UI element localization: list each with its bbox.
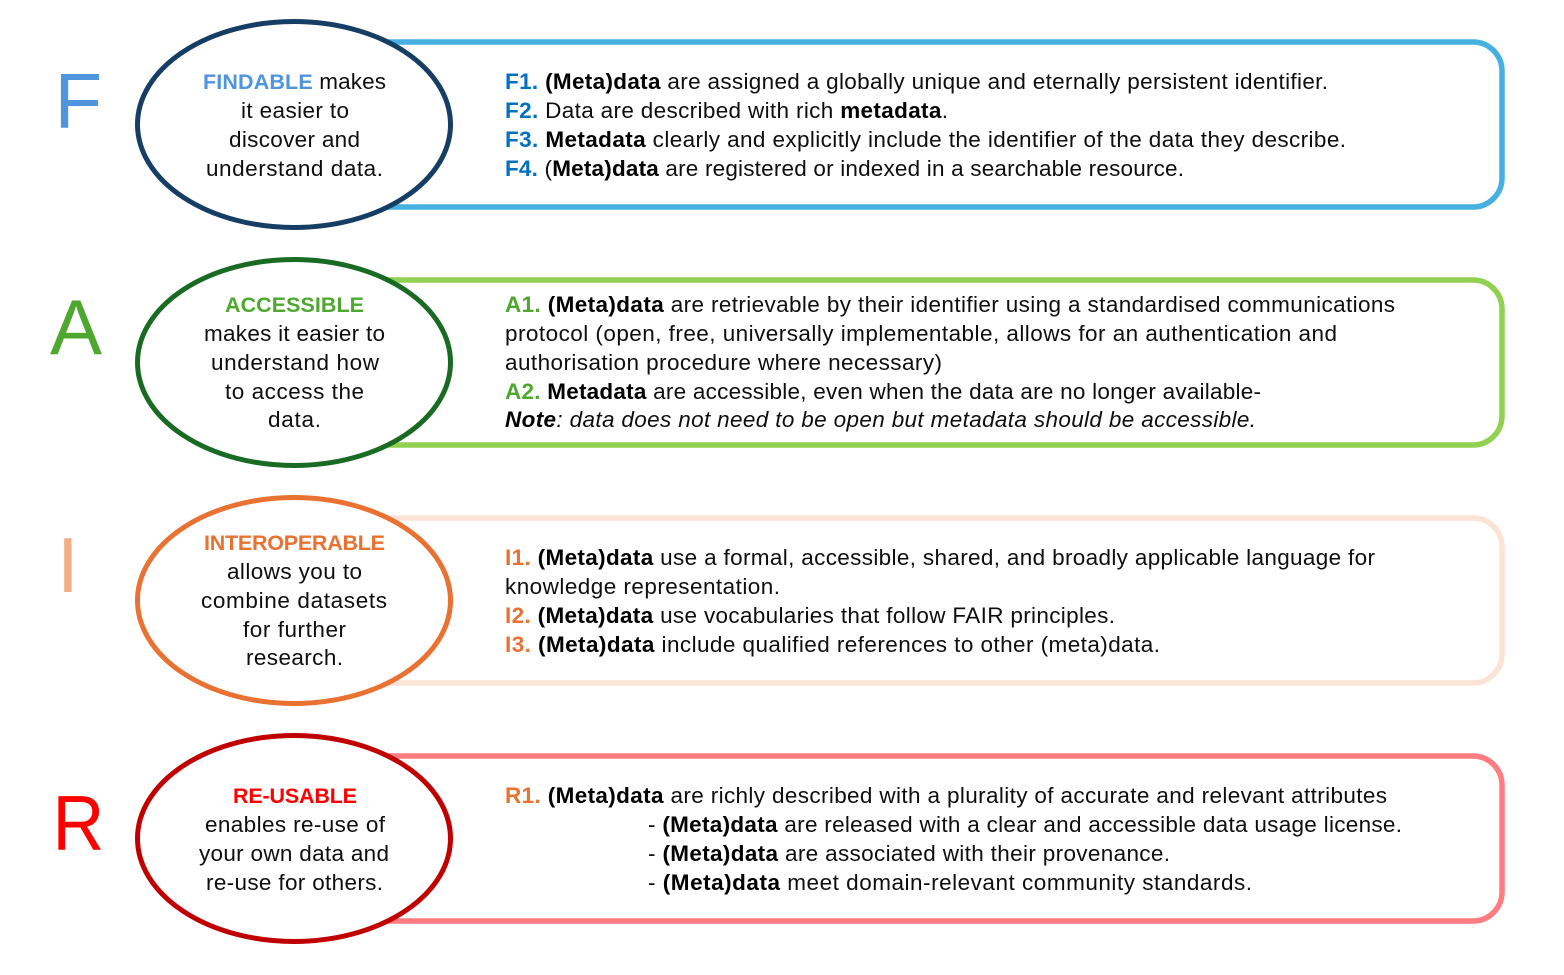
interoperable description: research. bbox=[246, 645, 343, 670]
findable description: discover and bbox=[229, 127, 360, 152]
interoperable principles I1-I3 bbox=[505, 545, 1376, 657]
interoperable statements box bbox=[300, 518, 1502, 683]
accessible principles A1-A2: A2. Metadata are accessible, even when the data are no longer available- bbox=[505, 379, 1261, 404]
letter A: A bbox=[50, 283, 102, 371]
re-usable description: re-use for others. bbox=[206, 870, 383, 895]
accessible principles A1-A2: protocol (open, free, universally implementable, allows for an authentication and bbox=[505, 321, 1337, 346]
interoperable ellipse bbox=[138, 498, 450, 704]
re-usable description bbox=[199, 784, 389, 895]
panel: findable bbox=[54, 22, 1502, 228]
findable principles F1-F4: F2. Data are described with rich metadata. bbox=[505, 98, 948, 123]
findable principles F1-F4 bbox=[505, 69, 1346, 181]
findable description: FINDABLE makes bbox=[203, 69, 386, 94]
re-usable principles R1: R1. (Meta)data are richly described with a plurality of accurate and relevant attributes bbox=[505, 783, 1387, 808]
letter F: F bbox=[54, 57, 102, 145]
re-usable ellipse bbox=[138, 736, 450, 942]
accessible description: understand how bbox=[211, 350, 380, 375]
accessible description bbox=[204, 293, 385, 432]
findable description: it easier to bbox=[241, 98, 349, 123]
panel: accessible bbox=[50, 260, 1502, 466]
letter I: I bbox=[57, 521, 79, 609]
findable ellipse bbox=[138, 22, 450, 228]
accessible description: ACCESSIBLE bbox=[225, 293, 364, 317]
accessible description: to access the bbox=[225, 379, 364, 404]
re-usable principles R1: - (Meta)data are associated with their provenance. bbox=[648, 841, 1170, 866]
re-usable principles R1 bbox=[505, 783, 1402, 895]
interoperable principles I1-I3: I3. (Meta)data include qualified references to other (meta)data. bbox=[505, 632, 1160, 657]
interoperable description: combine datasets bbox=[201, 588, 387, 613]
re-usable principles R1: - (Meta)data are released with a clear and accessible data usage license. bbox=[648, 812, 1402, 837]
findable principles F1-F4: F3. Metadata clearly and explicitly include the identifier of the data they describe. bbox=[505, 127, 1346, 152]
panel: interoperable bbox=[57, 498, 1502, 704]
panel: re-usable bbox=[52, 736, 1502, 942]
accessible principles A1-A2 bbox=[505, 292, 1395, 432]
accessible ellipse bbox=[138, 260, 450, 466]
re-usable principles R1: - (Meta)data meet domain-relevant community standards. bbox=[648, 870, 1252, 895]
re-usable description: RE-USABLE bbox=[233, 784, 357, 808]
re-usable description: your own data and bbox=[199, 841, 389, 866]
accessible statements box bbox=[300, 280, 1502, 445]
interoperable description: allows you to bbox=[227, 559, 362, 584]
accessible principles A1-A2: authorisation procedure where necessary) bbox=[505, 350, 942, 375]
interoperable principles I1-I3: I1. (Meta)data use a formal, accessible, shared, and broadly applicable language for bbox=[505, 545, 1376, 570]
accessible principles A1-A2: Note: data does not need to be open but metadata should be accessible. bbox=[505, 407, 1256, 432]
interoperable description: for further bbox=[243, 617, 346, 642]
accessible description: data. bbox=[268, 407, 321, 432]
accessible description: makes it easier to bbox=[204, 321, 385, 346]
letter R: R bbox=[52, 779, 104, 867]
interoperable principles I1-I3: I2. (Meta)data use vocabularies that follow FAIR principles. bbox=[505, 603, 1115, 628]
accessible principles A1-A2: A1. (Meta)data are retrievable by their identifier using a standardised communications bbox=[505, 292, 1395, 317]
findable description bbox=[203, 69, 386, 181]
interoperable description bbox=[201, 531, 387, 670]
interoperable description: INTEROPERABLE bbox=[204, 531, 385, 555]
findable description: understand data. bbox=[206, 156, 383, 181]
re-usable description: enables re-use of bbox=[205, 812, 386, 837]
re-usable statements box bbox=[300, 756, 1502, 921]
findable principles F1-F4: F1. (Meta)data are assigned a globally unique and eternally persistent identifier. bbox=[505, 69, 1328, 94]
findable statements box bbox=[300, 42, 1502, 207]
findable principles F1-F4: F4. (Meta)data are registered or indexed in a searchable resource. bbox=[505, 156, 1184, 181]
interoperable principles I1-I3: knowledge representation. bbox=[505, 574, 780, 599]
